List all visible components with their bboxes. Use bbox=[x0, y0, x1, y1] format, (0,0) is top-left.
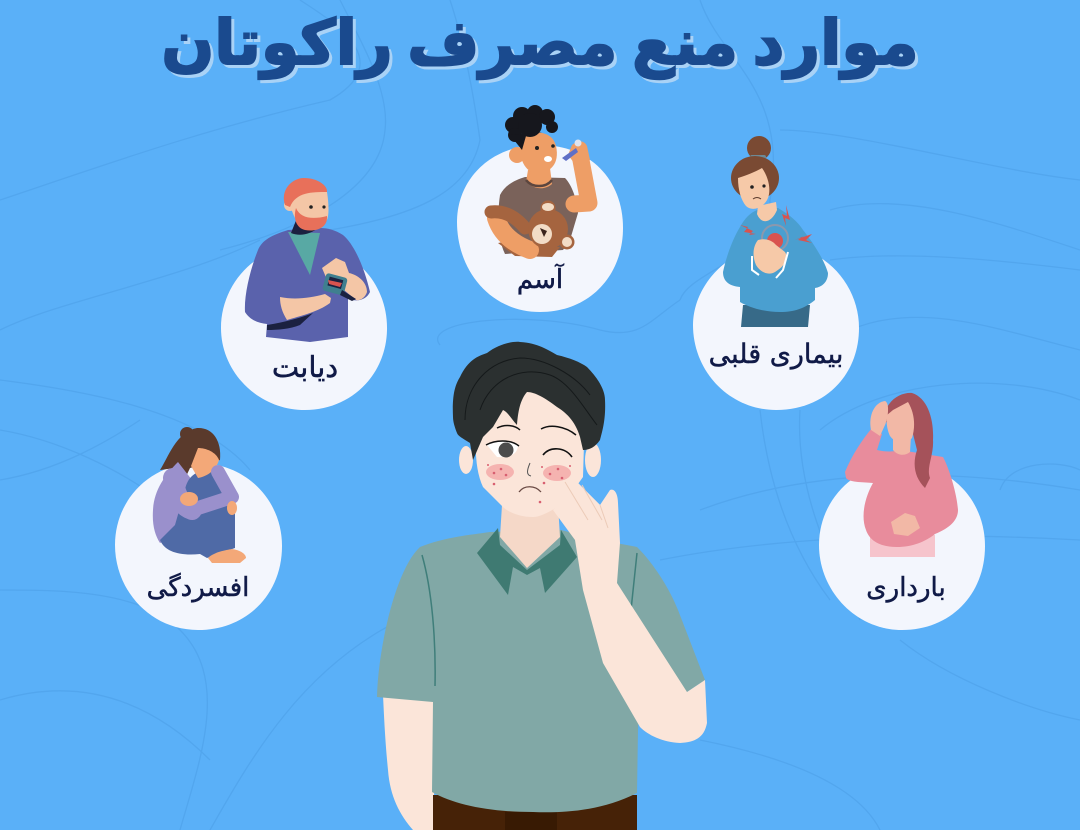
label: depression: افسردگی bbox=[147, 572, 249, 603]
circle: depression bbox=[115, 463, 282, 630]
icon: boy with inhaler and teddy bear bbox=[491, 105, 590, 257]
icon: man with glucose meter bbox=[245, 178, 370, 342]
raised arm and hand bbox=[553, 482, 707, 743]
label: diabetes: دیابت bbox=[272, 350, 338, 384]
icon: woman with chest pain bbox=[723, 136, 828, 327]
title: موارد منع مصرف راکوتان bbox=[161, 6, 919, 79]
neck bbox=[500, 505, 560, 568]
shirt bbox=[377, 530, 705, 812]
panel: asthma bbox=[457, 105, 623, 312]
hair bbox=[453, 342, 605, 460]
belt and trousers bbox=[433, 795, 637, 830]
collar bbox=[477, 528, 577, 595]
circle: diabetes bbox=[221, 245, 387, 410]
icon: pregnant woman bbox=[845, 393, 958, 557]
panel: depression bbox=[115, 427, 282, 630]
panel: heart disease bbox=[693, 136, 859, 410]
circle: pregnancy bbox=[819, 463, 985, 630]
shirt seams bbox=[422, 553, 637, 686]
head bbox=[453, 342, 608, 528]
left arm bbox=[383, 695, 435, 830]
face details bbox=[486, 426, 576, 503]
panel: pregnancy bbox=[819, 393, 985, 630]
circle: asthma bbox=[457, 145, 623, 312]
label: heart disease: بیماری قلبی bbox=[709, 339, 843, 370]
icon: sad seated woman bbox=[153, 427, 246, 563]
finger lines bbox=[565, 482, 608, 528]
label: pregnancy: بارداری bbox=[866, 573, 946, 603]
label: asthma: آسم bbox=[517, 263, 565, 295]
hair strands bbox=[465, 358, 597, 425]
title: موارد منع مصرف راکوتان bbox=[164, 9, 922, 82]
panel: diabetes bbox=[221, 178, 387, 410]
hand over cheek bbox=[553, 482, 600, 520]
illustration: man with acne bbox=[377, 342, 707, 830]
circle: heart disease bbox=[693, 245, 859, 410]
